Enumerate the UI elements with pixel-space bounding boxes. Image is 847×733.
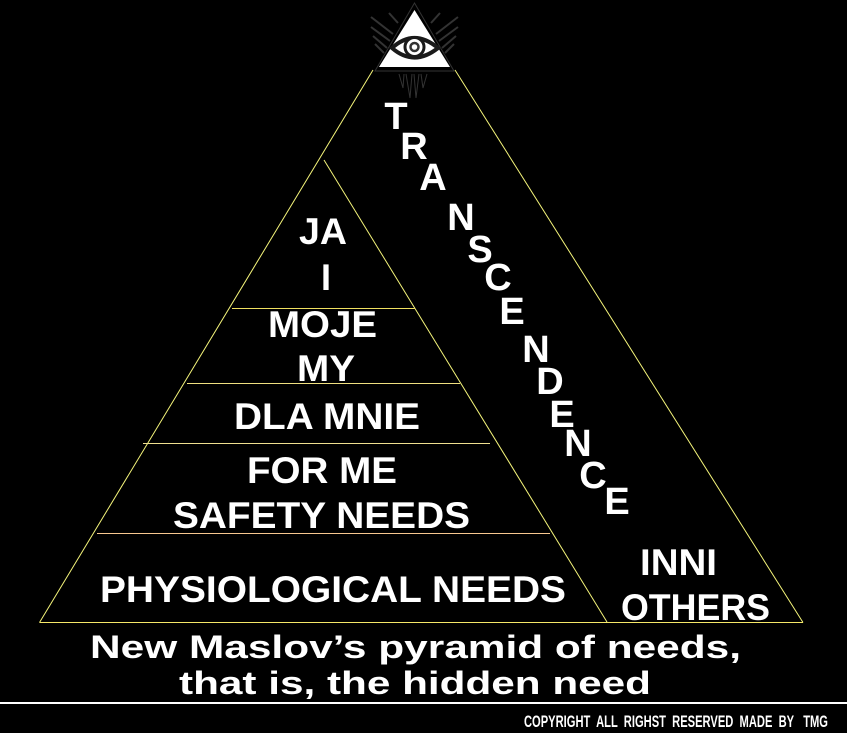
label: SAFETY NEEDS: SAFETY NEEDS bbox=[173, 495, 470, 536]
vertical word: TRANSCENDENCE: D bbox=[536, 361, 564, 403]
vertical word: TRANSCENDENCE: C bbox=[579, 455, 607, 497]
label: INNI: INNI bbox=[640, 542, 717, 583]
label: FOR ME: FOR ME bbox=[247, 450, 397, 491]
vertical word: TRANSCENDENCE bbox=[384, 96, 630, 523]
vertical word: TRANSCENDENCE: E bbox=[549, 394, 575, 436]
caption: that is, the hidden need bbox=[179, 665, 651, 701]
label: DLA MNIE: DLA MNIE bbox=[234, 396, 420, 437]
label: MY: MY bbox=[297, 348, 355, 389]
vertical word: TRANSCENDENCE: A bbox=[419, 157, 447, 199]
vertical word: TRANSCENDENCE: S bbox=[467, 229, 493, 271]
pyramid outline bbox=[40, 70, 803, 622]
vertical word: TRANSCENDENCE: C bbox=[484, 257, 512, 299]
vertical word: TRANSCENDENCE: N bbox=[447, 197, 475, 239]
label: MOJE: MOJE bbox=[268, 304, 377, 345]
label: PHYSIOLOGICAL NEEDS: PHYSIOLOGICAL NEEDS bbox=[100, 569, 566, 610]
label: JA: JA bbox=[299, 211, 347, 252]
pyramid labels bbox=[100, 211, 770, 628]
vertical word: TRANSCENDENCE: N bbox=[522, 329, 550, 371]
vertical word: TRANSCENDENCE: T bbox=[384, 96, 408, 138]
footer divider bbox=[0, 702, 847, 704]
vertical word: TRANSCENDENCE: R bbox=[400, 126, 428, 168]
label: I: I bbox=[321, 257, 331, 298]
vertical word: TRANSCENDENCE: E bbox=[604, 481, 630, 523]
caption bbox=[90, 629, 741, 701]
vertical word: TRANSCENDENCE: E bbox=[499, 291, 525, 333]
caption: New Maslov’s pyramid of needs, bbox=[90, 629, 741, 665]
label: OTHERS: OTHERS bbox=[621, 587, 770, 628]
icon: all-seeing eye bbox=[371, 3, 458, 98]
vertical word: TRANSCENDENCE: N bbox=[564, 423, 592, 465]
